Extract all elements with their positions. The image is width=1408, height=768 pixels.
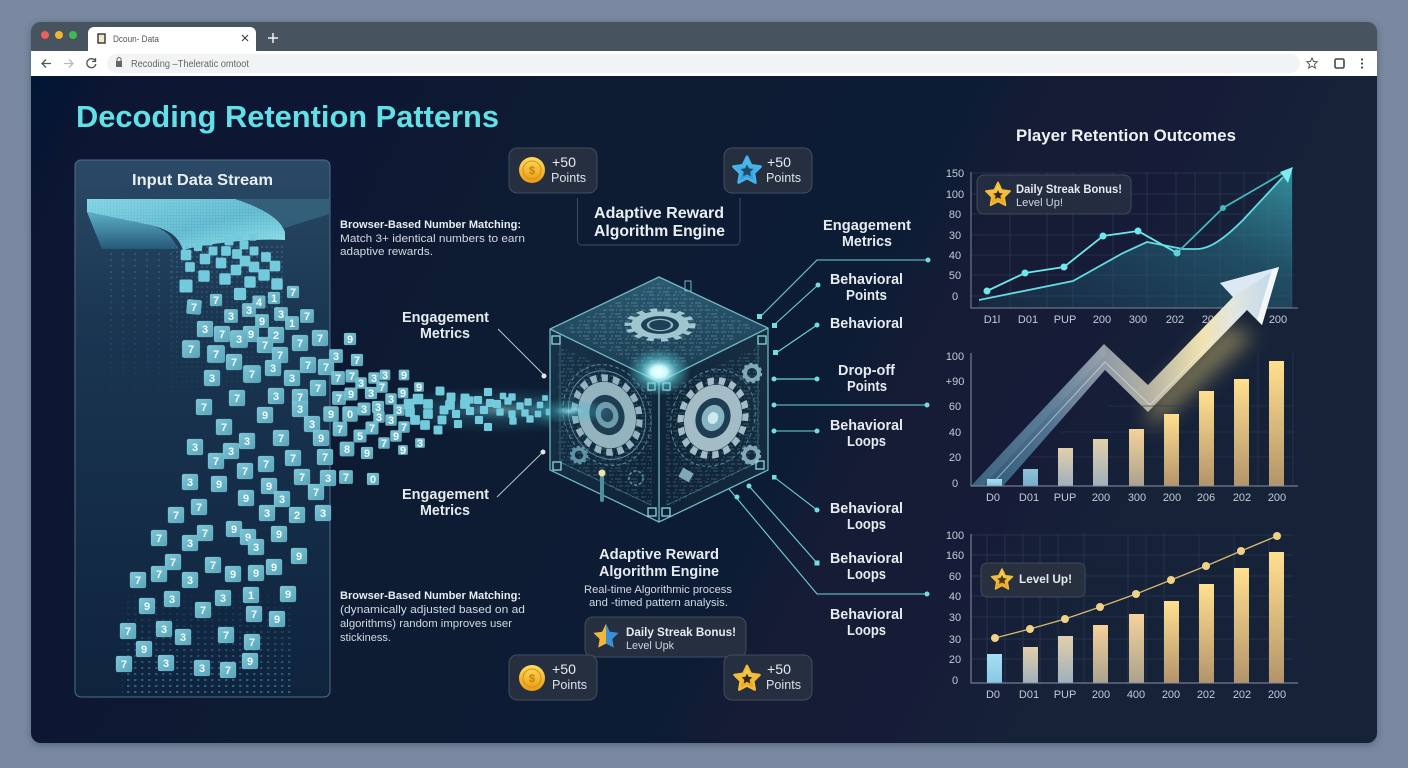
- chart: retention line chart: 40: [949, 250, 961, 262]
- streak callout: Level Upk: [626, 640, 674, 652]
- converging stream tiles: 7: [335, 373, 341, 385]
- falling number tiles: 7: [249, 369, 255, 381]
- falling number tiles: 3: [187, 538, 193, 550]
- converging stream tiles: 9: [400, 445, 406, 457]
- falling number tiles: 3: [297, 404, 303, 416]
- falling number tiles: 7: [249, 637, 255, 649]
- gear: right face: [671, 364, 755, 472]
- chart: retention line chart: 200: [1093, 314, 1111, 326]
- converging stream tiles: 9: [348, 389, 354, 401]
- labels: right column: Drop-off: [838, 363, 895, 379]
- chart: bar chart with growth: 200: [1092, 492, 1110, 504]
- big growth arrow: [971, 267, 1279, 486]
- title: Decoding Retention Patterns: [76, 99, 499, 134]
- falling number tiles: 9: [274, 614, 280, 626]
- converging stream tiles: 7: [379, 382, 385, 394]
- chart: retention line chart: D01: [1018, 314, 1038, 326]
- labels: left lower: [402, 487, 489, 519]
- badge: coin top: +50: [552, 154, 576, 170]
- chart: bars with line: 60: [949, 571, 961, 583]
- falling number tiles: 7: [221, 422, 227, 434]
- falling number tiles: 7: [121, 659, 127, 671]
- falling number tiles: 1: [289, 318, 295, 330]
- falling number tiles: 3: [209, 373, 215, 385]
- converging stream tiles: 3: [333, 351, 339, 363]
- falling number tiles: 9: [271, 562, 277, 574]
- converging stream tiles: 7: [354, 355, 360, 367]
- falling number tiles: 9: [230, 569, 236, 581]
- chart: bars with line: 200: [1092, 689, 1110, 701]
- labels: left: Engagement: [402, 310, 489, 326]
- chart: retention line chart: 150: [946, 168, 964, 180]
- converging stream tiles: 7: [381, 438, 387, 450]
- connectors: left labels to cube: [497, 329, 546, 497]
- falling number tiles: 3: [228, 446, 234, 458]
- falling number tiles: 3: [169, 594, 175, 606]
- falling number tiles: 9: [231, 524, 237, 536]
- converging stream tiles: 3: [375, 402, 381, 414]
- cube faces: [550, 277, 768, 522]
- converging stream tiles: 9: [328, 409, 334, 421]
- badge: blue star top: +50: [767, 154, 791, 170]
- falling number tiles: 7: [304, 311, 310, 323]
- engine title box: [578, 198, 740, 245]
- falling number tiles: 3: [163, 658, 169, 670]
- converging stream tiles: 0: [370, 474, 376, 486]
- converging stream tiles: 7: [401, 422, 407, 434]
- falling number tiles: 3: [253, 542, 259, 554]
- labels: right column: Behavioral: [830, 316, 903, 332]
- falling number tiles: 7: [305, 360, 311, 372]
- chart: bars with line: D01: [1019, 689, 1039, 701]
- chart: bars with line: 202: [1197, 689, 1215, 701]
- falling number tiles: 2: [294, 510, 300, 522]
- arrow tip: [1280, 167, 1293, 183]
- falling number tiles: 3: [289, 373, 295, 385]
- falling number tiles: 7: [231, 357, 237, 369]
- falling number tiles: 1: [271, 293, 277, 305]
- area series: [979, 168, 1292, 308]
- falling number tiles: 9: [245, 532, 251, 544]
- labels: right column: Loops: [847, 567, 886, 583]
- text block: adaptive matching note: stickiness.: [340, 632, 391, 644]
- chart: retention line chart: 30: [949, 230, 961, 242]
- axes: [971, 172, 1298, 308]
- falling number tiles: 7: [242, 466, 248, 478]
- chart: bar chart with growth: [946, 351, 1298, 504]
- chart: bars with line: 30: [949, 612, 961, 624]
- browser toolbar: [31, 51, 1377, 76]
- chart: bar chart with growth: 20: [949, 452, 961, 464]
- falling number tiles: 7: [277, 350, 283, 362]
- falling number tiles: 3: [236, 334, 242, 346]
- chart: bar chart with growth: 300: [1128, 492, 1146, 504]
- browser tab bar: [31, 22, 1377, 51]
- falling number tiles: 3: [161, 624, 167, 636]
- falling number tiles: [116, 233, 336, 678]
- text block: number matching rule: adaptive rewards.: [340, 246, 433, 258]
- converging stream tiles: 9: [401, 370, 407, 382]
- falling number tiles: 3: [187, 477, 193, 489]
- chart: bars with line: 100: [946, 530, 964, 542]
- falling number tiles: 7: [125, 626, 131, 638]
- falling number tiles: 7: [299, 472, 305, 484]
- falling number tiles: 9: [296, 551, 302, 563]
- chart: bars with line: [946, 530, 1298, 701]
- chart: retention line chart: 0: [952, 291, 958, 303]
- chart: retention line chart: 202: [1166, 314, 1184, 326]
- text block: number matching rule: [340, 219, 525, 258]
- chart: retention line chart: 100: [946, 189, 964, 201]
- chart: bar chart with growth: 0: [952, 478, 958, 490]
- chart: bars with line: 400: [1127, 689, 1145, 701]
- falling number tiles: 3: [192, 442, 198, 454]
- converging stream tiles: 3: [396, 405, 402, 417]
- engine caption: Real-time Algorithmic process: [584, 584, 733, 596]
- falling number tiles: 7: [323, 362, 329, 374]
- engine title box: Algorithm Engine: [594, 223, 725, 240]
- labels: right column: Behavioral: [830, 551, 903, 567]
- callout: level up: [981, 563, 1085, 597]
- converging stream tiles: 3: [358, 378, 364, 390]
- falling number tiles: 3: [228, 311, 234, 323]
- converging stream tiles: 9: [393, 431, 399, 443]
- falling number tiles: 7: [290, 453, 296, 465]
- chart: retention line chart: 300: [1129, 314, 1147, 326]
- core glow: [627, 348, 691, 396]
- falling number tiles: 7: [213, 456, 219, 468]
- small node pin: [598, 281, 691, 502]
- panel: input data stream: [75, 160, 330, 697]
- cube edges: [550, 277, 768, 522]
- converging stream tiles: 5: [357, 431, 363, 443]
- converging stream tiles: 7: [369, 423, 375, 435]
- chart: bar chart with growth: PUP: [1054, 492, 1076, 504]
- labels: left: [402, 310, 489, 342]
- labels: right column: Metrics: [842, 234, 892, 250]
- falling number tiles: 2: [273, 330, 279, 342]
- callout: daily streak: [977, 175, 1131, 214]
- chart: retention line chart: 50: [949, 270, 961, 282]
- falling number tiles: 7: [170, 557, 176, 569]
- falling number tiles: 7: [234, 393, 240, 405]
- falling number tiles: 3: [220, 593, 226, 605]
- labels: right column: Behavioral: [830, 418, 903, 434]
- labels: right column: Points: [846, 288, 887, 304]
- converging stream tiles: 9: [347, 334, 353, 346]
- falling number tiles: 7: [263, 459, 269, 471]
- chart: bar chart with growth: +90: [946, 376, 964, 388]
- heading: outcomes: Player Retention Outcomes: [1016, 126, 1236, 145]
- labels: right column: Engagement: [823, 218, 911, 234]
- converging stream tiles: 7: [337, 424, 343, 436]
- chart: bar chart with growth: 60: [949, 401, 961, 413]
- falling number tiles: 3: [273, 391, 279, 403]
- falling number tiles: 3: [270, 363, 276, 375]
- entering beam glow: [528, 398, 612, 424]
- falling number tiles: 7: [322, 452, 328, 464]
- badge: coin bottom: Points: [552, 678, 587, 692]
- chart: bar chart with growth: 200: [1163, 492, 1181, 504]
- converging stream tiles: 3: [376, 412, 382, 424]
- falling number tiles: 1: [248, 590, 254, 602]
- falling number tiles: 7: [297, 338, 303, 350]
- falling number tiles: 9: [276, 529, 282, 541]
- converging stream tiles: 3: [371, 373, 377, 385]
- falling number tiles: 7: [196, 502, 202, 514]
- falling number tiles: 3: [309, 419, 315, 431]
- badge: blue star top: [724, 148, 812, 193]
- falling number tiles: 3: [187, 575, 193, 587]
- engine caption: and -timed pattern analysis.: [589, 597, 728, 609]
- falling number tiles: 7: [188, 344, 194, 356]
- falling number tiles: 7: [219, 329, 225, 341]
- falling number tiles: 9: [259, 316, 265, 328]
- central cube engine: [528, 277, 768, 522]
- falling number tiles: 3: [279, 494, 285, 506]
- chart: retention line chart: 200: [1202, 314, 1220, 326]
- falling number tiles: 7: [135, 575, 141, 587]
- engine title box: Adaptive Reward: [594, 205, 724, 222]
- converging stream tiles: 3: [368, 388, 374, 400]
- falling number tiles: 7: [191, 302, 197, 314]
- chart: bar chart with growth: 100: [946, 351, 964, 363]
- converging stream tiles: 8: [344, 444, 350, 456]
- falling number tiles: 7: [173, 510, 179, 522]
- corner nodes: [552, 336, 766, 516]
- chart: bars with line: 202: [1233, 689, 1251, 701]
- browser toolbar: Recoding –Theleratic omtoot: [131, 59, 249, 70]
- converging stream tiles: 0: [347, 409, 353, 421]
- engine caption: Adaptive Reward: [599, 546, 719, 563]
- converging stream tiles: 3: [361, 404, 367, 416]
- falling number tiles: 7: [213, 349, 219, 361]
- connectors: cube to labels: [724, 258, 930, 596]
- callout: level up: Level Up!: [1019, 574, 1072, 586]
- chart: bar chart with growth: D0: [986, 492, 1000, 504]
- gear: left face: [563, 359, 651, 471]
- text block: number matching rule: Browser-Based Number Matching:: [340, 219, 521, 231]
- labels: right column: Loops: [847, 623, 886, 639]
- badge: coin top: [509, 148, 597, 193]
- falling number tiles: 3: [244, 436, 250, 448]
- chart: bars with line: 30: [949, 634, 961, 646]
- gear: top: [628, 310, 692, 340]
- badge: coin top: Points: [551, 171, 586, 185]
- labels: right column: Points: [847, 379, 887, 395]
- panel heading: Input Data Stream: [132, 172, 273, 189]
- chart: retention line chart: [946, 167, 1298, 326]
- falling number tiles: 7: [315, 383, 321, 395]
- falling number tiles: 3: [202, 324, 208, 336]
- falling number tiles: 7: [210, 560, 216, 572]
- falling number tiles: 7: [223, 630, 229, 642]
- falling number tiles: 9: [141, 644, 147, 656]
- converging stream tiles: 9: [400, 388, 406, 400]
- chart: bar chart with growth: 206: [1197, 492, 1215, 504]
- falling number tiles: 7: [262, 340, 268, 352]
- falling number tiles: 3: [180, 632, 186, 644]
- falling number tiles: 9: [247, 656, 253, 668]
- falling number tiles: 9: [262, 410, 268, 422]
- streak callout: Daily Streak Bonus!: [626, 627, 736, 639]
- falling number tiles: 3: [278, 309, 284, 321]
- falling number tiles: 7: [213, 295, 219, 307]
- bars: [987, 361, 1284, 486]
- falling number tiles: 3: [199, 663, 205, 675]
- falling number tiles: 7: [201, 402, 207, 414]
- labels: left lower: Engagement: [402, 487, 489, 503]
- chart: bars with line: 200: [1162, 689, 1180, 701]
- falling number tiles: 9: [216, 479, 222, 491]
- chart: bars with line: 40: [949, 591, 961, 603]
- converging stream tiles: 9: [364, 448, 370, 460]
- bars: [987, 552, 1284, 683]
- badge: coin top: $: [529, 165, 535, 177]
- callout: daily streak: Daily Streak Bonus!: [1016, 184, 1122, 196]
- converging stream tiles: 3: [417, 438, 423, 450]
- chart: bar chart with growth: D01: [1019, 492, 1039, 504]
- falling number tiles: 9: [144, 601, 150, 613]
- falling number tiles: 9: [318, 433, 324, 445]
- small gears: [571, 364, 761, 485]
- chart: retention line chart: PUP: [1054, 314, 1076, 326]
- chart: bars with line: PUP: [1054, 689, 1076, 701]
- labels: right column: Loops: [847, 434, 886, 450]
- falling number tiles: 7: [202, 528, 208, 540]
- falling number tiles: 9: [285, 589, 291, 601]
- labels: right column: Behavioral: [830, 501, 903, 517]
- chart: retention line chart: 200: [1269, 314, 1287, 326]
- labels: left: Metrics: [420, 326, 470, 342]
- badge: coin bottom: $: [529, 673, 535, 685]
- text block: adaptive matching note: algorithms) random improves user: [340, 618, 512, 630]
- badge: coin bottom: [509, 655, 597, 700]
- chart: retention line chart: 80: [949, 209, 961, 221]
- falling number tiles: 7: [317, 333, 323, 345]
- falling number tiles: 3: [246, 305, 252, 317]
- labels: right column: Loops: [847, 517, 886, 533]
- chart: bars with line: 200: [1268, 689, 1286, 701]
- streak callout: [585, 617, 746, 657]
- chart: bars with line: 20: [949, 654, 961, 666]
- falling number tiles: 9: [253, 568, 259, 580]
- falling number tiles: 4: [256, 297, 263, 309]
- chart: bars with line: 160: [946, 550, 964, 562]
- converging stream tiles: 7: [343, 472, 349, 484]
- line series: [987, 231, 1177, 291]
- chart: bar chart with growth: 40: [949, 427, 961, 439]
- badge: gold star bottom: +50: [767, 661, 791, 677]
- engine caption: [584, 546, 733, 609]
- falling number tiles: 9: [248, 329, 254, 341]
- converging stream tiles: 3: [382, 370, 388, 382]
- engine caption: Algorithm Engine: [599, 563, 719, 580]
- falling number tiles: 7: [156, 533, 162, 545]
- falling number tiles: 7: [313, 487, 319, 499]
- badge: gold star bottom: [724, 655, 812, 700]
- converging stream tiles: 3: [388, 394, 394, 406]
- falling number tiles: 7: [225, 665, 231, 677]
- chart: retention line chart: D1l: [984, 314, 1000, 326]
- badge: gold star bottom: Points: [766, 678, 801, 692]
- converging stream tiles: 9: [416, 382, 422, 394]
- text block: number matching rule: Match 3+ identical numbers to earn: [340, 233, 525, 245]
- chart: bar chart with growth: 202: [1233, 492, 1251, 504]
- falling number tiles: 9: [266, 481, 272, 493]
- converging stream tiles: 3: [388, 415, 394, 427]
- converging stream tiles: [323, 333, 565, 486]
- labels: right column: [823, 218, 911, 639]
- falling number tiles: 7: [290, 287, 296, 299]
- labels: left lower: Metrics: [420, 503, 470, 519]
- falling number tiles: 7: [278, 433, 284, 445]
- text block: adaptive matching note: [340, 590, 525, 644]
- text block: adaptive matching note: Browser-Based Number Matching:: [340, 590, 521, 602]
- chart: bars with line: 0: [952, 675, 958, 687]
- data sheet: [87, 199, 329, 697]
- falling number tiles: 7: [200, 605, 206, 617]
- badge: blue star top: Points: [766, 171, 801, 185]
- callout: daily streak: Level Up!: [1016, 197, 1063, 209]
- falling number tiles: 7: [156, 569, 162, 581]
- falling number tiles: 3: [325, 473, 331, 485]
- falling number tiles: 3: [264, 508, 270, 520]
- browser tab bar: Dcoun- Data: [113, 34, 160, 45]
- falling number tiles: 3: [320, 508, 326, 520]
- falling number tiles: 9: [243, 493, 249, 505]
- labels: right column: Behavioral: [830, 607, 903, 623]
- converging stream tiles: 7: [336, 393, 342, 405]
- falling number tiles: 7: [251, 609, 257, 621]
- labels: right column: Behavioral: [830, 272, 903, 288]
- chart: bars with line: D0: [986, 689, 1000, 701]
- converging stream tiles: 7: [349, 371, 355, 383]
- falling number tiles: 7: [297, 392, 303, 404]
- chart: bar chart with growth: 200: [1268, 492, 1286, 504]
- stream glow: [360, 386, 640, 434]
- badge: coin bottom: +50: [552, 661, 576, 677]
- text block: adaptive matching note: (dynamically adjusted based on ad: [340, 604, 525, 616]
- trend line: [995, 536, 1277, 638]
